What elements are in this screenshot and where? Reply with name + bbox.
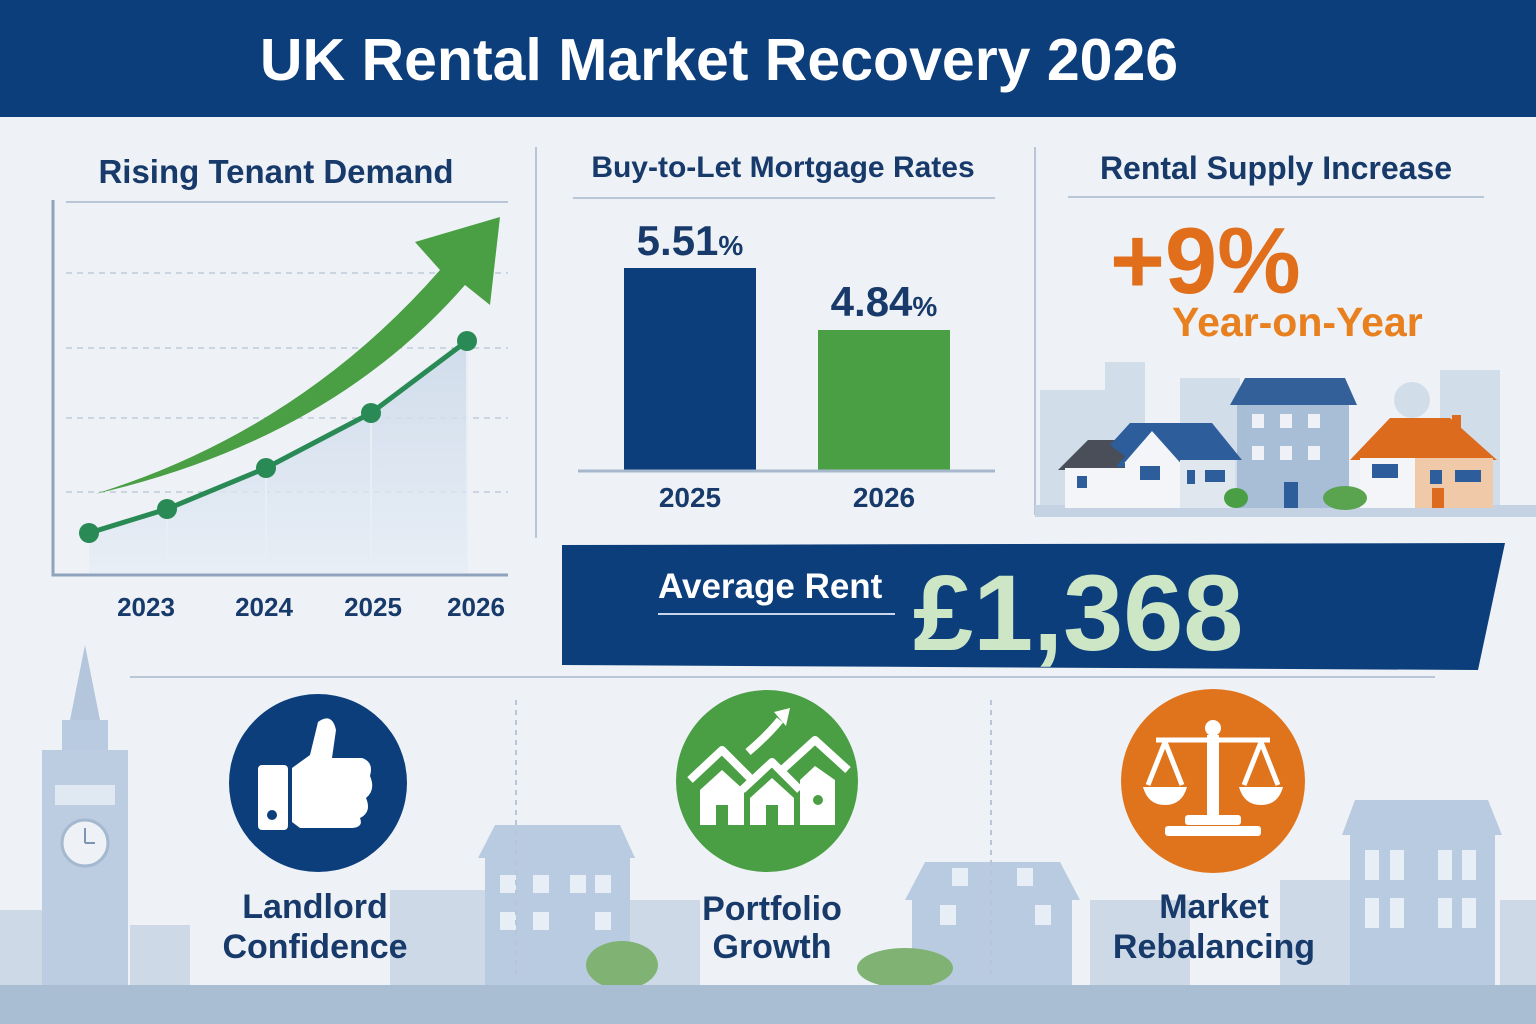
bar chart xyxy=(578,217,995,513)
icon: scales xyxy=(1121,689,1305,873)
axis labels: 2026 xyxy=(447,592,505,622)
panel: mortgage rates xyxy=(573,151,995,513)
background skyline xyxy=(0,880,1536,990)
panel: rising tenant demand xyxy=(53,153,508,622)
item: market rebalancing xyxy=(1113,689,1315,966)
item: landlord confidence: Landlord xyxy=(242,888,388,926)
axis labels: 2023 xyxy=(117,592,175,622)
panel: rental supply: Year-on-Year xyxy=(1172,299,1423,345)
item: portfolio growth: Portfolio xyxy=(702,890,842,928)
ground xyxy=(0,985,1536,1024)
axis labels xyxy=(117,592,505,622)
header xyxy=(0,0,1536,117)
bar chart: 4.84% xyxy=(831,278,937,325)
arrow: growth xyxy=(95,217,500,494)
banner: average rent xyxy=(562,543,1505,673)
trees xyxy=(586,941,953,989)
item: market rebalancing: Rebalancing xyxy=(1113,928,1315,966)
heading: rental supply: Rental Supply Increase xyxy=(1100,150,1452,186)
item: portfolio growth xyxy=(676,690,858,966)
bar chart: 2025 xyxy=(659,482,721,513)
item: market rebalancing: Market xyxy=(1159,888,1269,926)
heading: mortgage rates: Buy-to-Let Mortgage Rates xyxy=(591,151,975,184)
label: average rent: Average Rent xyxy=(658,567,883,606)
illustration: houses xyxy=(1035,362,1536,517)
title: UK Rental Market Recovery 2026 xyxy=(260,27,1178,93)
panel: rental supply xyxy=(1035,150,1536,517)
bar chart: 5.51% xyxy=(637,217,743,264)
line chart xyxy=(79,331,477,573)
item: landlord confidence: Confidence xyxy=(222,928,408,966)
item: portfolio growth: Growth xyxy=(713,928,831,966)
item: landlord confidence xyxy=(222,694,408,966)
axis labels: 2025 xyxy=(344,592,402,622)
stat: +9%: +9% xyxy=(1110,208,1301,313)
icon: houses growth xyxy=(676,690,858,872)
heading: rising tenant demand: Rising Tenant Demand xyxy=(98,153,454,190)
bar chart: 2026 xyxy=(853,482,915,513)
icon: Big Ben xyxy=(42,645,128,990)
icon: thumbs up xyxy=(229,694,407,872)
stat: £1,368: £1,368 xyxy=(913,552,1243,673)
axis labels: 2024 xyxy=(235,592,293,622)
